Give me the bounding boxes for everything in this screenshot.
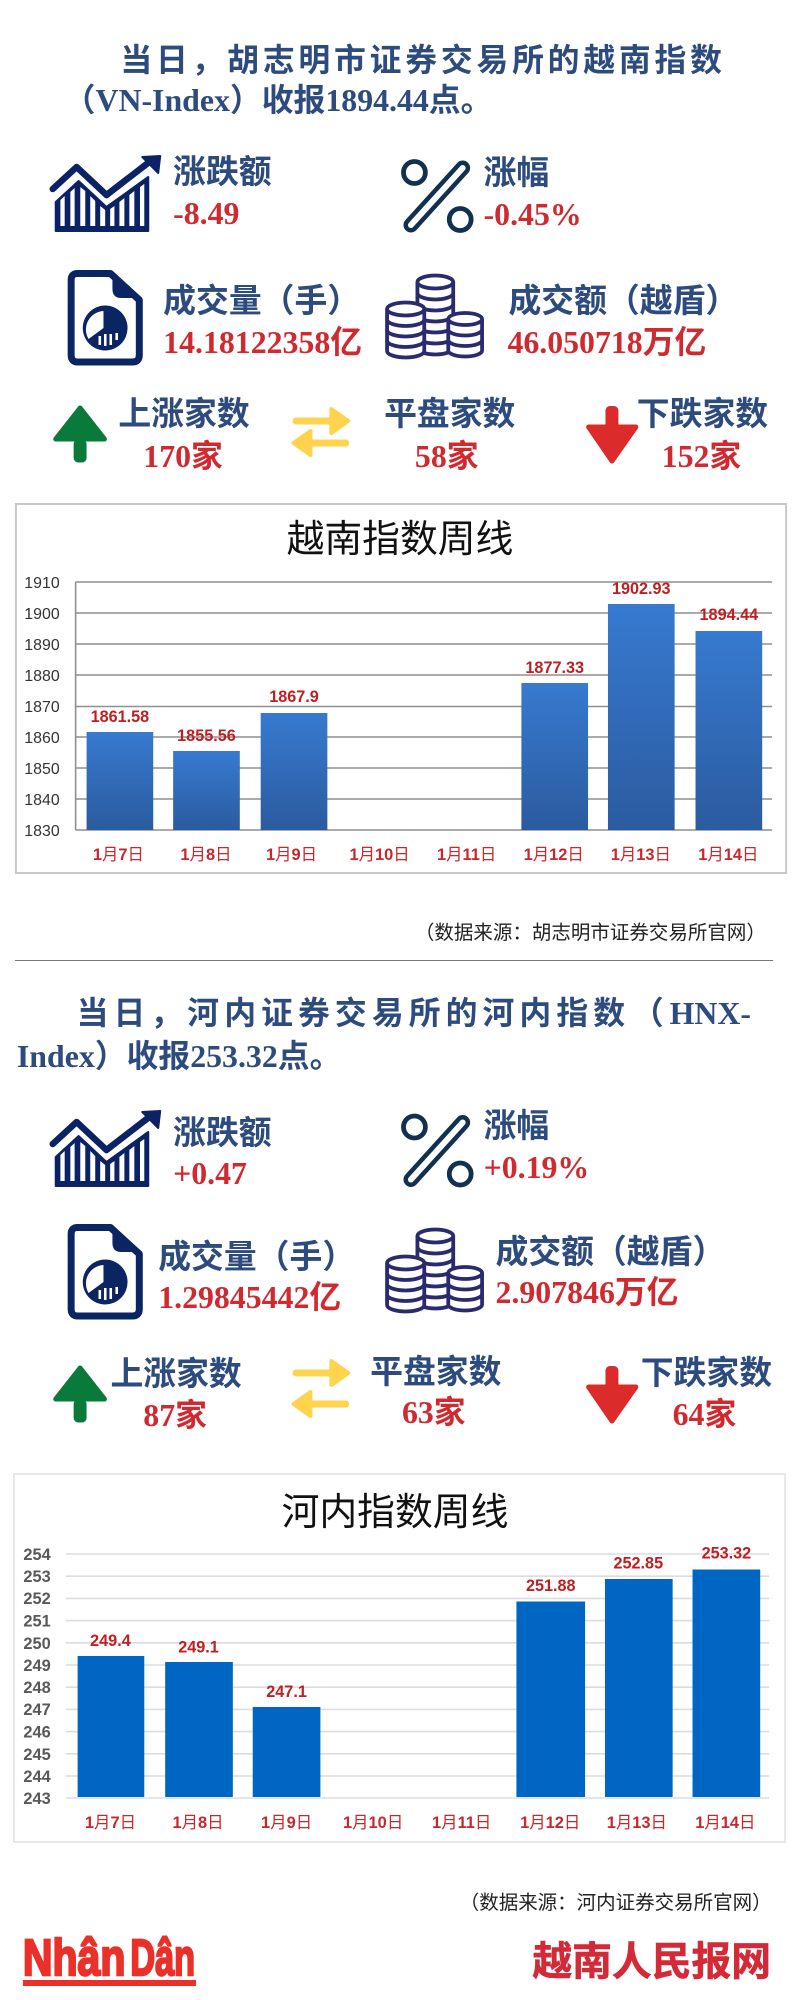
icon: up arrow	[56, 1368, 104, 1422]
label: decliners: 下跌家数	[637, 395, 768, 432]
y axis gridlines and labels: 244	[23, 1768, 52, 1786]
chart title: 河内指数周线	[282, 1492, 508, 1534]
y axis gridlines and labels: 1870	[24, 699, 60, 716]
label: advancers: 上涨家数	[110, 1355, 242, 1392]
value: change: -8.49	[173, 196, 239, 231]
heading: VN-Index summary: （VN-Index）收报1894.44点。	[64, 83, 492, 118]
bar value labels: 252.85	[614, 1554, 663, 1573]
y axis gridlines and labels: 247	[23, 1701, 51, 1719]
x axis date labels: 1月12日	[524, 846, 584, 864]
bars	[78, 1570, 760, 1797]
label: decliners: 下跌家数	[641, 1354, 772, 1391]
label: unchanged: 平盘家数	[384, 395, 515, 432]
bar value labels: 1902.93	[612, 580, 671, 598]
icon: rising chart	[53, 1111, 160, 1186]
label: percent change: 涨幅	[484, 154, 549, 191]
heading: VN-Index summary: 当日，胡志明市证券交易所的越南指数	[120, 43, 726, 78]
bar value labels: 251.88	[526, 1577, 576, 1595]
x axis date labels: 1月7日	[85, 1814, 136, 1832]
x axis date labels: 1月9日	[266, 846, 317, 864]
y axis gridlines and labels: 250	[23, 1635, 51, 1653]
y axis gridlines and labels: 1840	[24, 792, 60, 809]
icon: rising chart	[53, 156, 160, 231]
heading: HNX-Index summary: HNX-	[670, 996, 751, 1031]
label: change: 涨跌额	[173, 153, 272, 190]
icon: document with pie	[71, 1225, 142, 1316]
x axis date labels: 1月7日	[93, 846, 144, 864]
value: volume: 1.29845442亿	[158, 1280, 341, 1315]
label: unchanged: 平盘家数	[370, 1353, 502, 1390]
y axis gridlines and labels: 251	[23, 1612, 51, 1631]
panel: VN-Index weekly chart	[16, 504, 786, 873]
x axis date labels: 1月9日	[261, 1814, 312, 1832]
section: HNX-Index	[14, 996, 785, 1914]
bar value labels: 1861.58	[91, 708, 149, 726]
x axis date labels: 1月11日	[437, 846, 496, 864]
heading: HNX-Index summary: 当日，河内证券交易所的河内指数	[77, 996, 630, 1031]
y axis gridlines and labels: 253	[23, 1568, 51, 1586]
y axis gridlines and labels: 249	[23, 1657, 51, 1675]
bars	[87, 604, 762, 830]
bar value labels: 249.1	[178, 1638, 219, 1657]
y axis gridlines and labels: 1890	[24, 637, 60, 654]
y axis gridlines and labels: 248	[23, 1679, 51, 1697]
y axis gridlines and labels: 252	[23, 1590, 51, 1608]
bar value labels: 1894.44	[700, 606, 758, 624]
x axis date labels: 1月10日	[349, 846, 410, 864]
y axis gridlines and labels: 1910	[24, 575, 60, 592]
label: turnover: 成交额（越盾）	[508, 282, 738, 319]
logo: Nhan Dan: Nhân	[23, 1929, 125, 1986]
heading: HNX-Index summary: Index）收报253.32点。	[17, 1039, 341, 1074]
value: decliners: 152家	[662, 439, 741, 474]
label: turnover: 成交额（越盾）	[496, 1233, 725, 1270]
value: change: +0.47	[173, 1156, 247, 1191]
x axis date labels: 1月10日	[343, 1814, 403, 1832]
bar value labels	[90, 1544, 751, 1701]
value: volume: 14.18122358亿	[163, 325, 362, 360]
bar value labels: 253.32	[702, 1544, 751, 1563]
heading: VN-Index summary	[64, 43, 726, 118]
heading: HNX-Index summary: （	[632, 996, 664, 1031]
heading: HNX-Index summary	[17, 996, 751, 1074]
y axis gridlines and labels	[24, 575, 772, 840]
value: advancers: 170家	[143, 439, 223, 474]
y axis gridlines and labels: 246	[23, 1723, 51, 1742]
value: percent change: +0.19%	[484, 1150, 589, 1185]
icon: up arrow	[56, 408, 104, 462]
value: advancers: 87家	[143, 1398, 207, 1433]
x axis date labels: 1月11日	[432, 1814, 491, 1832]
section: VN-Index	[16, 43, 786, 944]
x axis date labels: 1月8日	[180, 846, 232, 864]
icon: unchanged arrows	[293, 1361, 349, 1416]
value: percent change: -0.45%	[484, 197, 582, 232]
x axis date labels	[93, 846, 758, 864]
brand name: 越南人民报网	[532, 1940, 771, 1984]
chart title: 越南指数周线	[287, 519, 513, 561]
icon: percent	[403, 162, 471, 230]
icon: unchanged arrows	[293, 409, 349, 455]
icon: percent	[403, 1116, 471, 1185]
y axis gridlines and labels: 245	[23, 1746, 51, 1764]
bar value labels: 247.1	[266, 1683, 307, 1701]
y axis gridlines and labels: 1850	[24, 761, 60, 778]
x axis date labels	[85, 1814, 755, 1832]
icon: coin stacks	[387, 276, 482, 358]
panel: HNX-Index weekly chart	[14, 1474, 785, 1842]
label: volume: 成交量（手）	[163, 282, 360, 319]
x axis date labels: 1月8日	[172, 1814, 224, 1832]
value: unchanged: 63家	[402, 1395, 466, 1430]
bar value labels	[91, 580, 758, 745]
y axis gridlines and labels: 1880	[24, 668, 60, 685]
source note: HNX-Index: （数据来源：河内证券交易所官网）	[460, 1892, 772, 1914]
y axis gridlines and labels	[23, 1546, 769, 1808]
source note: VN-Index: （数据来源：胡志明市证券交易所官网）	[415, 922, 766, 944]
label: change: 涨跌额	[173, 1114, 272, 1151]
label: percent change: 涨幅	[484, 1107, 549, 1144]
icon: down arrow	[589, 1366, 636, 1421]
x axis date labels: 1月13日	[607, 1814, 667, 1832]
bar value labels: 1877.33	[525, 659, 584, 677]
y axis gridlines and labels: 254	[23, 1546, 52, 1564]
y axis gridlines and labels: 1830	[24, 823, 60, 840]
x axis date labels: 1月14日	[695, 1814, 755, 1832]
x axis date labels: 1月13日	[611, 846, 671, 864]
label: advancers: 上涨家数	[118, 395, 250, 432]
bar value labels: 1867.9	[269, 688, 319, 706]
value: unchanged: 58家	[415, 439, 479, 474]
value: decliners: 64家	[673, 1397, 736, 1432]
value: turnover: 46.050718万亿	[507, 325, 706, 360]
x axis date labels: 1月14日	[698, 846, 758, 864]
label: volume: 成交量（手）	[158, 1238, 355, 1275]
icon: down arrow	[589, 406, 636, 461]
value: turnover: 2.907846万亿	[496, 1275, 679, 1310]
y axis gridlines and labels: 1900	[24, 606, 60, 623]
y axis gridlines and labels: 243	[23, 1790, 51, 1808]
icon: document with pie	[71, 271, 142, 362]
x axis date labels: 1月12日	[520, 1814, 580, 1832]
bar value labels: 249.4	[90, 1632, 131, 1650]
logo: Nhan Dan: Dân	[130, 1929, 195, 1986]
bar value labels: 1855.56	[177, 727, 236, 745]
icon: coin stacks	[387, 1230, 482, 1312]
y axis gridlines and labels: 1860	[24, 730, 60, 747]
